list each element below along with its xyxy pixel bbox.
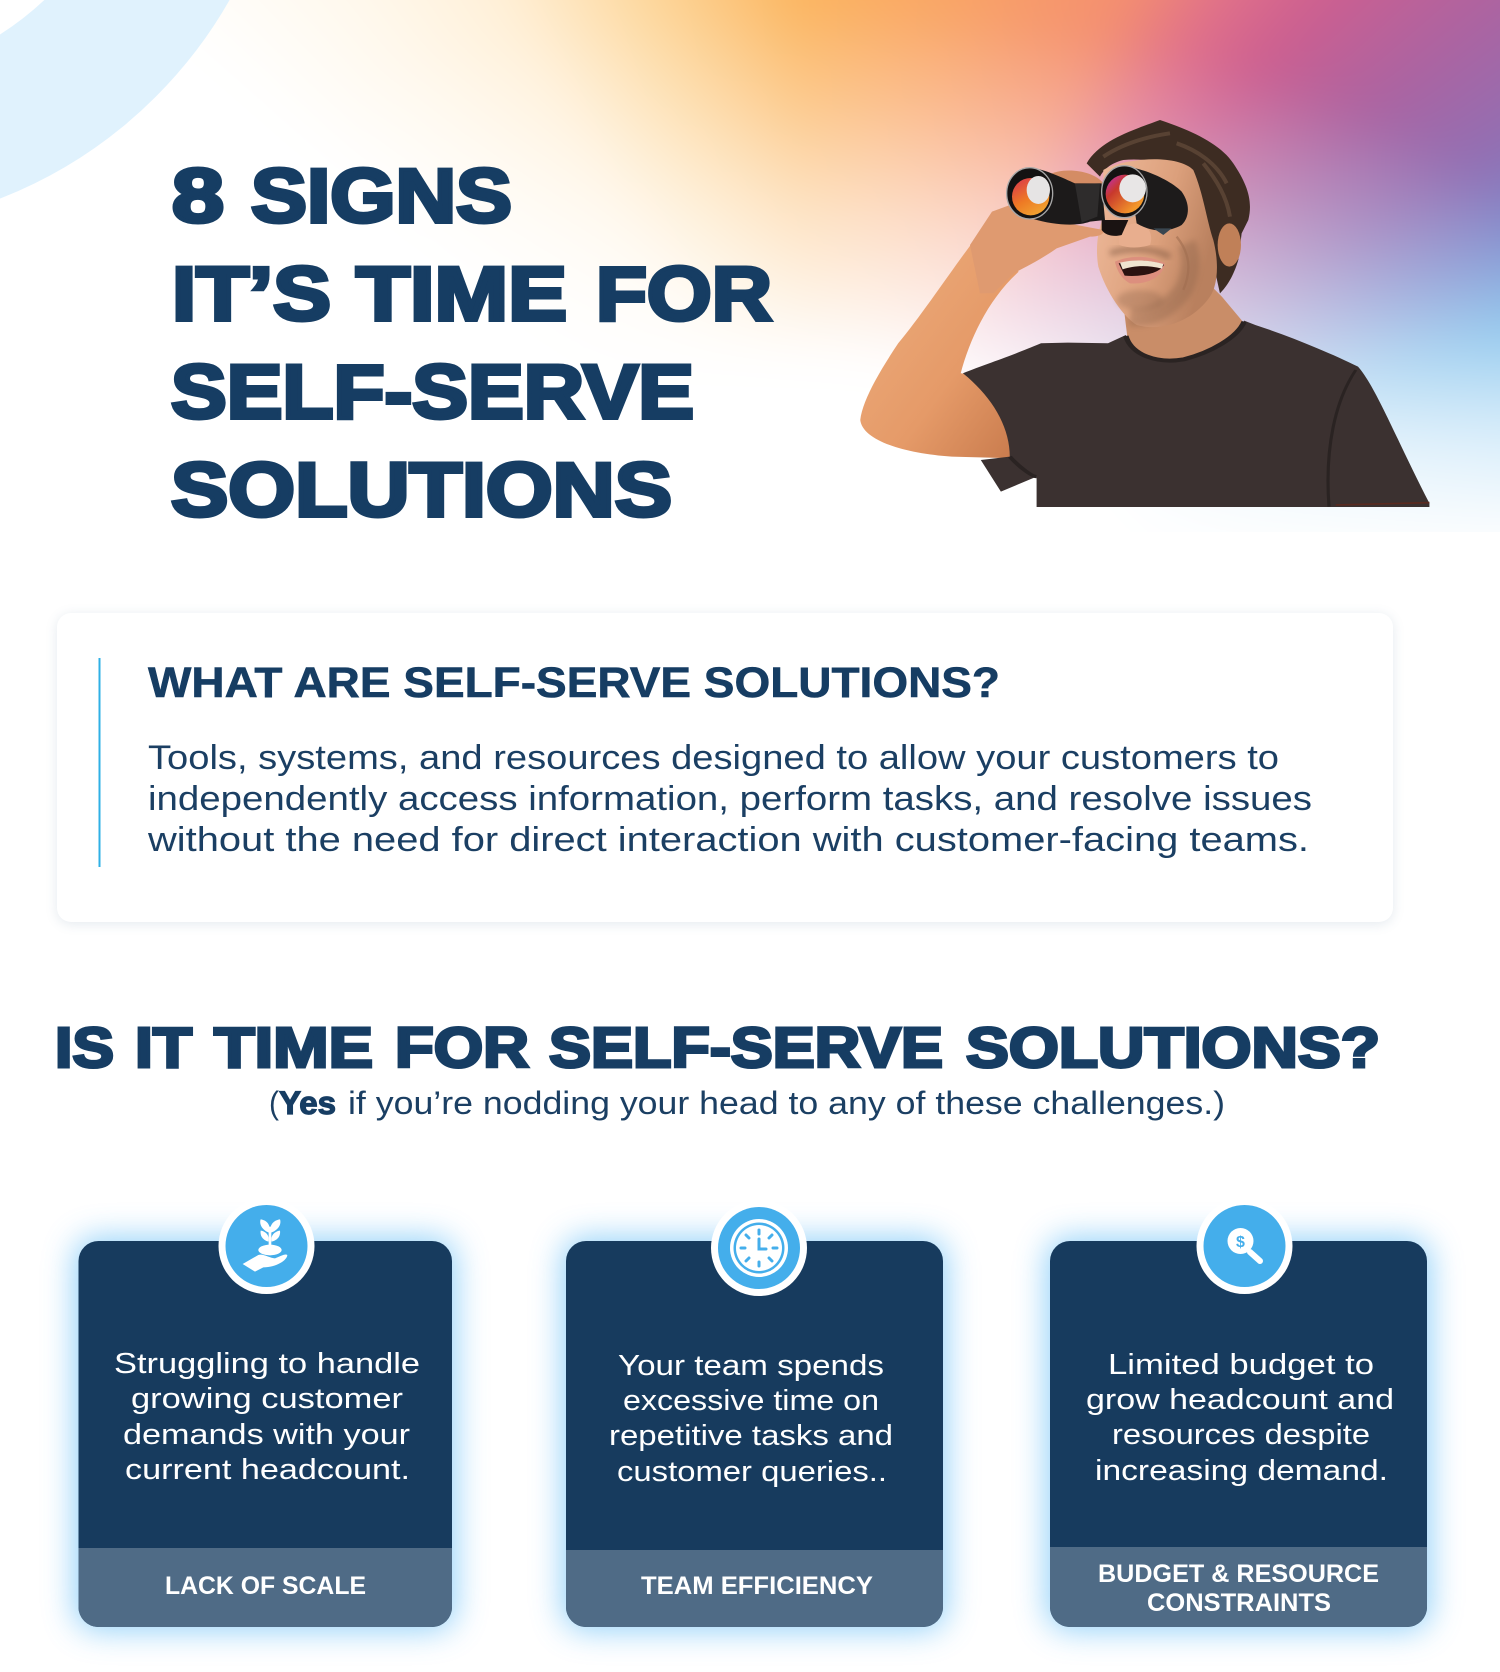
card body [78,1241,452,1627]
gradient header background [247,0,1500,522]
card footer [566,1550,943,1627]
panel body text: Tools, systems, and resources designed to allow your customers to [148,739,1279,777]
card text: current headcount. [125,1454,410,1486]
section heading: IS [55,1016,114,1080]
title: IT’S [172,252,331,337]
card body [566,1241,943,1627]
card body [1050,1241,1427,1627]
card label: CONSTRAINTS [1147,1589,1331,1617]
card: lack of scale [75,1198,455,1630]
panel body text [147,739,1312,859]
card text: increasing demand. [1095,1455,1388,1487]
accent line [98,658,100,867]
card footer [78,1548,452,1627]
panel shadow [57,615,1393,924]
man head, hand and binoculars [970,120,1250,327]
section heading: TIME [214,1016,373,1080]
icon: magnifier with dollar: $ [1236,1234,1245,1251]
section heading: SOLUTIONS? [966,1016,1380,1080]
card text [1086,1349,1394,1487]
card: budget and resource constraints [1047,1198,1430,1630]
photo: man with binoculars [860,120,1429,507]
icon: magnifier with dollar [1196,1198,1292,1294]
card text: grow headcount and [1086,1384,1394,1416]
card label [1098,1560,1379,1617]
card glow [75,1238,455,1630]
section heading: IT [135,1016,192,1080]
card text: excessive time on [623,1385,879,1417]
card: team efficiency [563,1200,946,1630]
title: 8 [172,154,224,239]
man body: arm, neck and t-shirt [860,243,1429,507]
section subheading: if you’re nodding your head to any of these challenges.) [348,1085,1225,1121]
card text [609,1350,893,1488]
card text: Limited budget to [1108,1349,1374,1381]
title: SOLUTIONS [171,448,672,533]
panel: what are self-serve solutions [57,613,1393,924]
title: TIME [356,252,567,337]
icon: hand with seedling [218,1198,314,1294]
title: FOR [596,252,772,337]
panel background [57,613,1393,922]
card label: BUDGET & RESOURCE [1098,1560,1379,1588]
card text: Your team spends [618,1350,884,1382]
title: SELF-SERVE [171,350,694,435]
card text: repetitive tasks and [609,1420,893,1452]
icon: clock [711,1200,807,1296]
card text: growing customer [131,1383,403,1415]
card text: resources despite [1112,1419,1370,1451]
card text [114,1348,420,1486]
card text: Struggling to handle [114,1348,420,1380]
card footer [1050,1547,1427,1627]
title: SIGNS [251,154,512,239]
decorative arc top-left [0,0,216,156]
section heading: SELF-SERVE [549,1016,943,1080]
section heading [55,1016,1380,1080]
panel body text: independently access information, perform tasks, and resolve issues [148,780,1312,818]
section heading: FOR [395,1016,529,1080]
section subheading: ( [269,1085,279,1121]
card label: LACK OF SCALE [165,1572,366,1600]
card text: demands with your [123,1419,410,1451]
card text: customer queries.. [617,1456,887,1488]
section subheading: Yes [279,1085,336,1121]
card glow [563,1238,946,1630]
card glow [1047,1238,1430,1630]
card label: TEAM EFFICIENCY [641,1572,873,1600]
title [171,154,772,533]
panel body text: without the need for direct interaction with customer-facing teams. [147,821,1309,859]
panel heading: WHAT ARE SELF-SERVE SOLUTIONS? [148,659,1000,707]
